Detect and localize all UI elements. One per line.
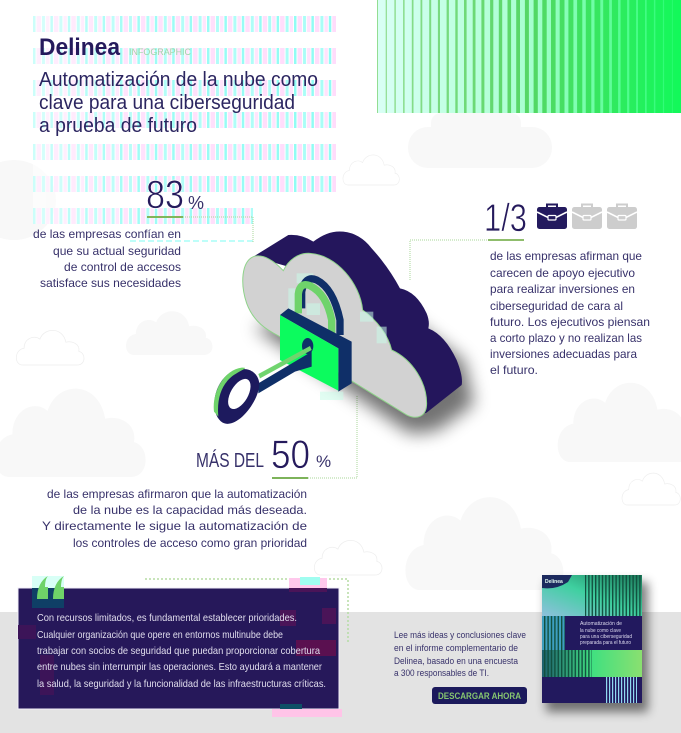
report cover bbox=[542, 575, 648, 712]
stat: 50 percent: 50 bbox=[271, 433, 310, 477]
paragraph: de las empresas afirmaron que la automatización bbox=[47, 488, 307, 501]
grey footer band bbox=[0, 612, 681, 733]
stat: 83 percent: % bbox=[188, 193, 204, 213]
dotted connector lines bbox=[183, 217, 487, 478]
title: Automatización de la nube como bbox=[39, 68, 318, 91]
paragraph: de las empresas confían en bbox=[33, 228, 181, 241]
lock top and side bbox=[280, 308, 352, 392]
green stripes top right bbox=[377, 0, 681, 113]
keyhole bbox=[302, 338, 313, 354]
paragraph: ciberseguridad de cara al bbox=[490, 300, 623, 313]
shackle bbox=[302, 279, 340, 335]
paragraph bbox=[33, 228, 181, 290]
paragraph bbox=[490, 250, 650, 377]
call to action text: Delinea, basado en una encuesta bbox=[394, 656, 519, 667]
paragraph: para realizar inversiones en bbox=[490, 283, 635, 296]
cloud front bbox=[243, 253, 427, 417]
title bbox=[39, 68, 318, 137]
glitch marks bbox=[18, 577, 342, 717]
quote text bbox=[37, 613, 326, 690]
cloud shadow bbox=[254, 294, 474, 434]
cover title: para una ciberseguridad bbox=[580, 634, 632, 640]
underline bbox=[488, 239, 524, 241]
quote text: Con recursos limitados, es fundamental establecer prioridades. bbox=[37, 613, 297, 624]
paragraph: carecen de apoyo ejecutivo bbox=[490, 267, 635, 280]
paragraph: los controles de acceso como gran prioridad bbox=[73, 537, 307, 550]
cover title: la nube como clave bbox=[580, 628, 621, 634]
paragraph: de las empresas afirman que bbox=[490, 250, 642, 263]
logo: Delinea bbox=[39, 34, 121, 61]
quote text: Cualquier organización que opere en entornos multinube debe bbox=[37, 630, 283, 641]
call to action text: a 300 responsables de TI. bbox=[394, 668, 489, 679]
quote text: trabajar con socios de seguridad que puedan proporcionar cobertura bbox=[37, 646, 320, 657]
cover title: preparada para el futuro bbox=[580, 640, 631, 646]
title: clave para una ciberseguridad bbox=[39, 91, 295, 114]
call to action text: Lee más ideas y conclusiones clave bbox=[394, 630, 526, 641]
paragraph: inversiones adecuadas para bbox=[490, 348, 638, 361]
cloud side bbox=[253, 231, 462, 417]
quote text: entre nubes sin interrumpir las operaciones. Esto ayudará a mantener bbox=[37, 662, 322, 673]
stat: 83 percent bbox=[33, 173, 204, 290]
underline bbox=[147, 216, 183, 218]
cover small logo: Delinea bbox=[545, 579, 563, 585]
padlock bbox=[280, 279, 352, 392]
paragraph: a corto plazo y no realizan las bbox=[490, 332, 642, 345]
title: a prueba de futuro bbox=[39, 114, 197, 137]
key bbox=[214, 346, 312, 424]
stat: 83 percent: 83 bbox=[146, 173, 184, 217]
icon: briefcases bbox=[537, 204, 637, 229]
cover base bbox=[542, 575, 642, 703]
underline bbox=[272, 477, 308, 479]
stat: 50 percent: % bbox=[316, 452, 331, 471]
lock front bbox=[280, 315, 338, 391]
cover lower image bbox=[542, 650, 642, 677]
paragraph: satisface sus necesidades bbox=[40, 277, 181, 290]
dotted quote connector bbox=[145, 579, 348, 642]
stat: one third: 1/3 bbox=[484, 197, 527, 240]
paragraph bbox=[42, 488, 307, 550]
stat: 50 percent: MÁS DEL bbox=[196, 449, 264, 472]
paragraph: que su actual seguridad bbox=[53, 245, 181, 258]
stat: one third bbox=[484, 197, 650, 377]
quote box bbox=[18, 588, 339, 709]
download button bbox=[432, 687, 527, 704]
cover title strip bbox=[542, 616, 642, 650]
paragraph: de la nube es la capacidad más deseada. bbox=[73, 504, 307, 517]
quote text: la salud, la seguridad y la funcionalidad de las infraestructuras críticas. bbox=[37, 679, 326, 690]
glitch patches on cloud bbox=[288, 273, 387, 400]
cover shadow bbox=[546, 582, 648, 712]
cover top image bbox=[542, 575, 642, 616]
illustration: cloud with padlock and key bbox=[214, 231, 474, 434]
cover bottom stripes bbox=[605, 677, 637, 703]
call to action text bbox=[394, 630, 526, 679]
background clouds bbox=[0, 113, 681, 590]
paragraph: el futuro. bbox=[490, 364, 538, 377]
infographic tag: INFOGRAPHIC bbox=[129, 47, 191, 57]
download button: DESCARGAR AHORA bbox=[438, 691, 521, 702]
striped header background bbox=[33, 16, 336, 241]
paragraph: Y directamente le sigue la automatización de bbox=[42, 520, 307, 533]
call to action text: en el informe complementario de bbox=[394, 643, 518, 654]
logo and title bbox=[39, 34, 318, 137]
quote mark bbox=[32, 576, 64, 608]
paragraph: futuro. Los ejecutivos piensan bbox=[490, 316, 650, 329]
paragraph: de control de accesos bbox=[64, 261, 181, 274]
cover title: Automatización de bbox=[580, 621, 622, 627]
cover title bbox=[580, 621, 632, 646]
stat: 50 percent bbox=[42, 433, 331, 550]
panel: quote bbox=[18, 576, 348, 717]
